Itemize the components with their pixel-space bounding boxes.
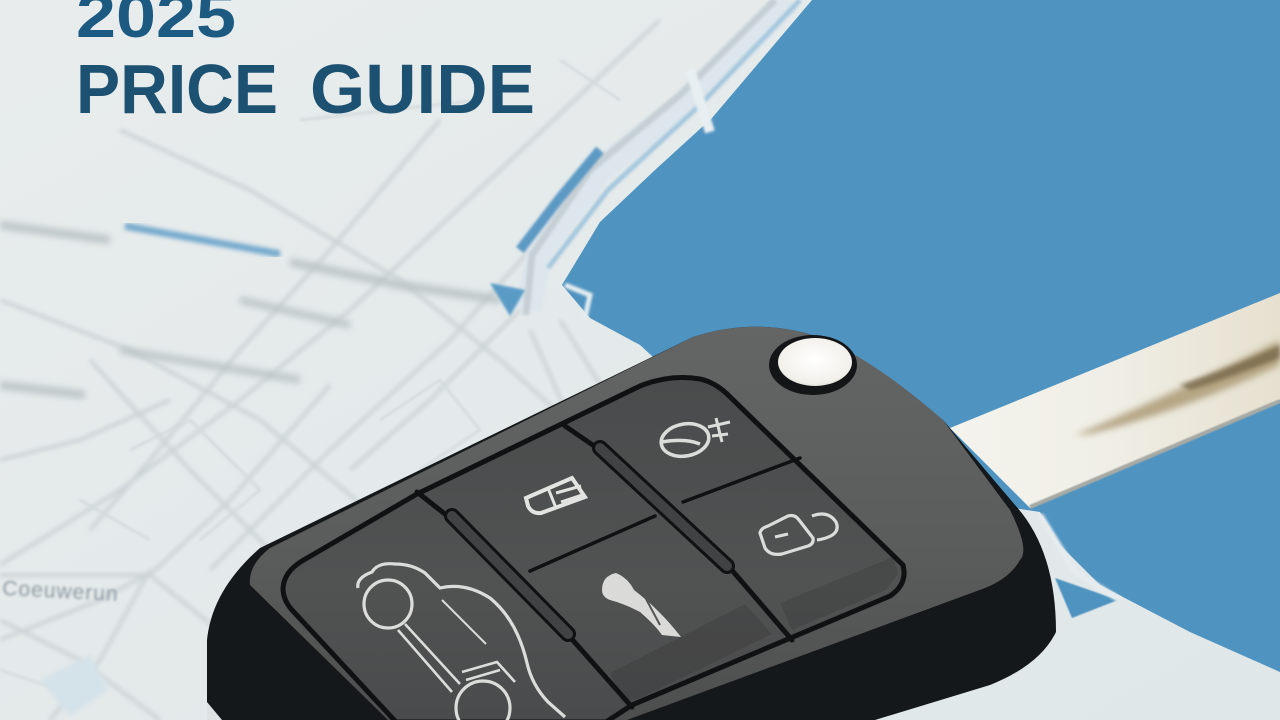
blurred map labels [0,225,500,395]
fob side shell [207,327,1056,720]
icon: open padlock [760,514,837,554]
inlet [490,283,525,316]
release button [769,335,857,395]
divider: right bar highlight [600,448,727,566]
icon: key shape [602,573,681,637]
divider: left bar highlight [452,516,568,634]
title: GUIDE [310,50,535,128]
water area [562,0,1280,672]
coastline [520,0,800,318]
silver base edge [207,702,222,720]
button slots [417,426,800,707]
fob top face [250,327,1023,720]
divider: left bar [452,516,568,634]
title: PRICE [76,50,278,128]
button shading bands [610,557,898,702]
button surface [283,378,904,720]
divider: right bar [600,448,727,566]
key blade [950,293,1280,508]
icon: trunk [526,478,585,513]
key fob [207,327,1056,720]
icon: car outline [358,564,565,720]
map label: Coeuwerun [2,577,119,606]
title [76,0,535,128]
icon: headlamp [659,418,730,460]
